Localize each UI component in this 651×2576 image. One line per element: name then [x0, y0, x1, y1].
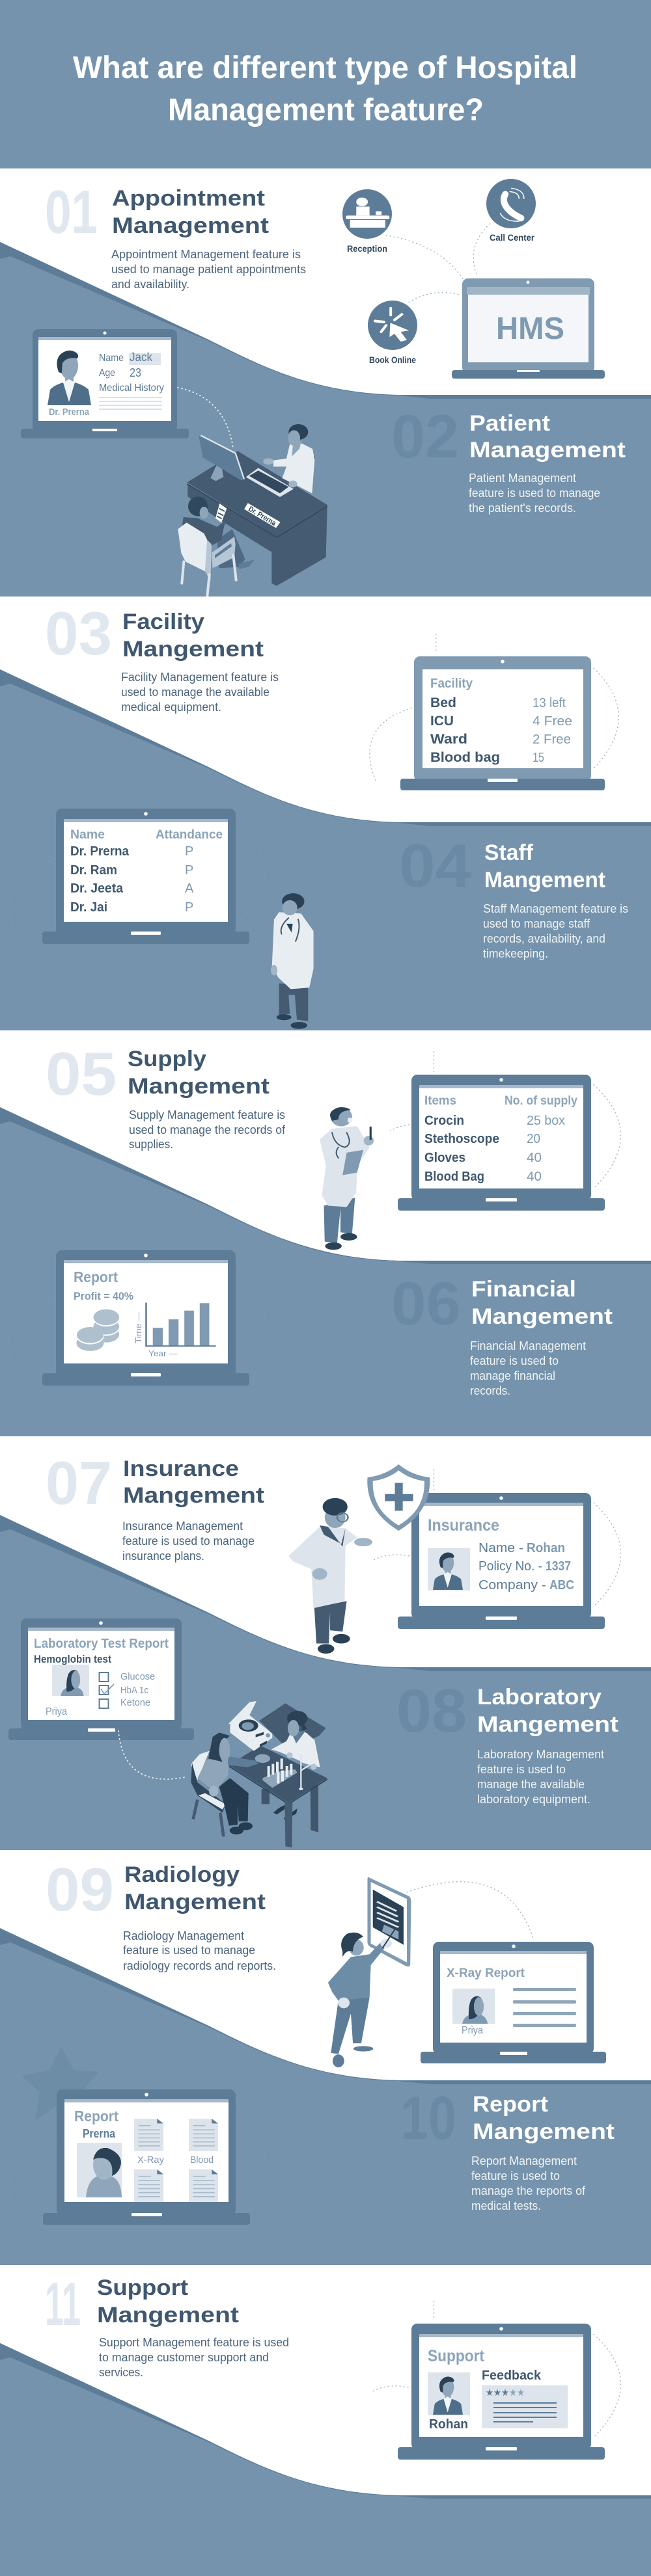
number 08: 08	[396, 1676, 467, 1745]
call center label: Call Center	[490, 233, 535, 243]
description	[122, 1519, 255, 1563]
heading: Mangement	[473, 2119, 615, 2144]
description: used to manage the available	[121, 685, 270, 699]
attendance table: Dr. Jeeta	[70, 881, 124, 896]
record fields: 23	[130, 366, 141, 379]
description	[99, 2335, 289, 2379]
description: Appointment Management feature is	[111, 247, 301, 261]
number 06: 06	[391, 1269, 461, 1337]
attendance table: P	[185, 900, 193, 915]
x-ray report title: X-Ray Report	[447, 1966, 525, 1980]
panel: 07 insurance management	[0, 1436, 651, 1671]
description	[123, 1929, 276, 1972]
description: Insurance Management	[122, 1519, 243, 1533]
policy details: Company -	[478, 1578, 546, 1592]
description: records, availability, and	[483, 932, 605, 945]
patient name: Priya	[462, 2025, 483, 2036]
description: Supply Management feature is	[129, 1108, 285, 1121]
supply rows: 40	[527, 1170, 542, 1184]
description: feature is used to	[477, 1762, 566, 1776]
white wave background	[0, 1850, 651, 2080]
icon: book online	[368, 301, 417, 350]
record fields	[99, 351, 164, 410]
bar chart: Time —	[133, 1312, 143, 1343]
laptop: support feedback	[398, 2324, 605, 2460]
heading	[128, 1047, 270, 1099]
heading: Management	[112, 213, 269, 238]
table text: Bed	[430, 695, 456, 710]
attendance table: Dr. Jai	[70, 900, 107, 915]
heading	[123, 1456, 264, 1508]
heading	[477, 1685, 618, 1737]
panel: 08 laboratory management	[8, 1618, 618, 1847]
feedback label: Feedback	[482, 2368, 542, 2383]
policy details: Name -	[478, 1541, 523, 1555]
attendance table: Dr. Prerna	[70, 844, 130, 859]
icon: reception	[342, 189, 392, 239]
report title: Laboratory Test Report	[34, 1637, 169, 1651]
panel: 06 financial management	[8, 1250, 613, 1397]
illustration: doctor with clipboard	[320, 1107, 374, 1250]
number 01: 01	[45, 178, 98, 246]
description: laboratory equipment.	[477, 1792, 590, 1806]
patient name: Prerna	[83, 2127, 116, 2140]
description: timekeeping.	[483, 946, 548, 960]
number 02: 02	[391, 402, 459, 470]
heading: Supply	[128, 1047, 206, 1071]
white wave background	[0, 168, 651, 395]
avatar: Priya	[52, 1665, 89, 1696]
description: feature is used to manage	[123, 1943, 255, 1957]
book online label: Book Online	[369, 355, 416, 365]
heading: Mangement	[123, 1483, 264, 1508]
illustration: laboratory team	[191, 1701, 327, 1847]
attendance table: Dr. Ram	[70, 863, 117, 878]
heading	[97, 2275, 239, 2328]
description: Staff Management feature is	[483, 902, 628, 915]
wave shadow band	[0, 669, 651, 826]
feedback card: ★★	[509, 2387, 525, 2398]
supply rows: 20	[527, 1132, 540, 1146]
report lines	[513, 1988, 576, 2027]
attendance table: Attandance	[156, 828, 223, 842]
title: What are different type of Hospital	[73, 51, 577, 85]
title: Management feature?	[168, 93, 484, 127]
heading: Mangement	[477, 1712, 618, 1737]
policy details: Policy No. -	[478, 1559, 542, 1574]
laptop: financial report	[42, 1250, 249, 1386]
laptop: insurance record	[398, 1493, 605, 1629]
description	[483, 902, 628, 960]
description	[470, 1339, 586, 1397]
description: manage financial	[470, 1369, 555, 1382]
feedback card: ★★★	[486, 2387, 509, 2398]
supply rows: Stethoscope	[424, 1132, 499, 1146]
heading: Mangement	[124, 1890, 266, 1914]
heading: Support	[97, 2275, 188, 2300]
description: supplies.	[129, 1137, 173, 1151]
description	[477, 1747, 604, 1806]
record fields: Name	[99, 353, 124, 364]
description: Radiology Management	[123, 1929, 244, 1942]
avatar: Rohan	[428, 1548, 470, 1590]
customer name: Rohan	[429, 2417, 468, 2432]
bar chart	[133, 1302, 216, 1358]
description: medical equipment.	[121, 700, 221, 714]
supply rows: Items	[424, 1094, 456, 1108]
reception label: Reception	[347, 244, 387, 254]
heading	[112, 186, 269, 238]
heading	[469, 411, 626, 463]
white wave background	[0, 2265, 651, 2495]
panel: 04 staff management	[8, 809, 628, 1029]
record fields: Age	[99, 368, 115, 379]
description: manage the reports of	[471, 2184, 586, 2197]
table text: Ward	[430, 732, 467, 747]
avatar: Prerna	[77, 2143, 122, 2197]
description: feature is used to manage	[469, 486, 600, 500]
checklist: Glucose	[120, 1671, 155, 1682]
panel: 09 radiology management	[0, 1850, 651, 2084]
illustration: standing doctor	[271, 893, 314, 1029]
document labels: Blood	[190, 2154, 214, 2166]
feedback card	[482, 2385, 568, 2428]
wave shadow band	[0, 2343, 651, 2499]
laptop: report documents	[43, 2089, 250, 2225]
heading	[124, 1862, 266, 1914]
heading: Financial	[471, 1277, 576, 1302]
description: used to manage the records of	[129, 1123, 286, 1136]
number 07: 07	[46, 1449, 112, 1517]
description: records.	[470, 1384, 510, 1397]
table text: 4 Free	[533, 714, 572, 729]
policy details: 1337	[546, 1559, 571, 1574]
attendance table: P	[185, 863, 193, 878]
heading	[122, 610, 264, 662]
description: services.	[99, 2365, 143, 2379]
table text	[430, 677, 572, 765]
supply rows: Crocin	[424, 1114, 464, 1128]
description: to manage customer support and	[99, 2350, 269, 2364]
policy details	[478, 1541, 574, 1592]
heading: Mangement	[471, 1304, 613, 1329]
checklist: Ketone	[120, 1697, 150, 1708]
heading	[471, 1277, 613, 1329]
description: radiology records and reports.	[123, 1959, 276, 1972]
number 11: 11	[45, 2270, 81, 2338]
avatar: doctor	[48, 351, 91, 405]
description: medical tests.	[471, 2199, 541, 2212]
description: feature is used to	[471, 2169, 560, 2182]
description: insurance plans.	[122, 1549, 204, 1563]
policy details: Rohan	[527, 1541, 565, 1555]
avatar: Priya	[452, 1989, 495, 2024]
bar chart: Year —	[148, 1348, 178, 1358]
heading: Mangement	[122, 637, 264, 662]
white wave background	[0, 1436, 651, 1667]
description: Support Management feature is used	[99, 2335, 289, 2349]
attendance table: Name	[70, 828, 105, 842]
panel: 10 report management	[8, 2047, 615, 2225]
table text: 2 Free	[533, 732, 571, 747]
table text: ICU	[430, 714, 454, 729]
heading: Report	[473, 2092, 548, 2117]
wave shadow band	[0, 1928, 651, 2084]
description: feature is used to manage	[122, 1534, 255, 1548]
panel: 05 supply management	[0, 1030, 651, 1264]
supply rows: Blood Bag	[424, 1170, 484, 1184]
name plate text: Dr. Prerna	[247, 505, 277, 528]
patient name: Priya	[46, 1706, 67, 1717]
HMS text: HMS	[496, 312, 564, 346]
description: used to manage patient appointments	[111, 262, 306, 276]
description: Facility Management feature is	[121, 670, 279, 684]
panel: 11 support management	[0, 2265, 651, 2499]
description	[111, 247, 306, 291]
policy details: ABC	[549, 1578, 574, 1592]
illustration: doctor with glasses	[288, 1498, 372, 1654]
heading: Management	[469, 438, 626, 463]
panel: 02 patient management	[21, 329, 626, 597]
description	[469, 471, 600, 515]
description: Laboratory Management	[477, 1747, 604, 1761]
laptop: supply table	[398, 1075, 605, 1211]
heading	[473, 2092, 615, 2144]
description: and availability.	[111, 277, 189, 291]
description	[471, 2154, 586, 2212]
document icons	[134, 2119, 218, 2202]
white wave background	[0, 1030, 651, 1261]
insurance title: Insurance	[428, 1516, 499, 1535]
laptop: facility table	[400, 656, 605, 790]
record fields: Jack	[130, 351, 153, 364]
decorative star	[21, 2047, 98, 2120]
illustration: doctor at desk with patient	[178, 424, 327, 597]
checklist: HbA 1c	[120, 1685, 148, 1696]
supply rows	[424, 1094, 577, 1184]
laptop: attendance	[42, 809, 249, 944]
icon: shield with cross	[367, 1464, 430, 1531]
number 03: 03	[45, 599, 112, 667]
table text: Facility	[430, 677, 473, 691]
table text: 15	[533, 751, 544, 765]
heading: Mangement	[128, 1074, 270, 1099]
white wave background	[0, 597, 651, 822]
description	[129, 1108, 286, 1151]
description: Report Management	[471, 2154, 577, 2167]
laptop: patient record	[21, 329, 189, 438]
heading: Patient	[469, 411, 550, 436]
laptop: HMS	[452, 278, 605, 379]
heading: Laboratory	[477, 1685, 602, 1710]
heading: Insurance	[123, 1456, 239, 1481]
avatar: Rohan	[428, 2372, 470, 2415]
number 04: 04	[399, 831, 471, 900]
attendance table: A	[185, 881, 194, 896]
illustration: woman at x-ray board	[328, 1877, 411, 2067]
attendance table: P	[185, 844, 193, 859]
heading: Radiology	[124, 1862, 240, 1887]
wave shadow band	[0, 1107, 651, 1264]
number 10: 10	[400, 2084, 456, 2152]
wave shadow band	[0, 1515, 651, 1671]
document labels	[137, 2154, 214, 2166]
report title: Report	[74, 1268, 118, 1285]
test name: Hemoglobin test	[34, 1653, 111, 1665]
panel: 01 appointment management	[0, 168, 651, 399]
table text: Blood bag	[430, 750, 500, 765]
icon: call center	[486, 179, 536, 228]
description: Financial Management	[470, 1339, 586, 1352]
supply rows: 40	[527, 1151, 542, 1165]
wave shadow band	[0, 242, 651, 399]
support title: Support	[428, 2347, 485, 2365]
document labels: X-Ray	[137, 2154, 164, 2166]
number 05: 05	[46, 1040, 117, 1108]
heading: Mangement	[97, 2303, 239, 2328]
description: manage the available	[477, 1777, 585, 1791]
laptop: laboratory test report	[8, 1618, 194, 1740]
heading: Mangement	[484, 868, 605, 892]
table text: 13 left	[533, 696, 566, 710]
heading: Staff	[484, 840, 534, 865]
description: used to manage staff	[483, 917, 590, 930]
number 09: 09	[46, 1855, 114, 1924]
icon: coin stacks	[76, 1309, 119, 1351]
supply rows: 25 box	[527, 1114, 565, 1128]
doctor name: Dr. Prerna	[49, 407, 90, 418]
description: the patient's records.	[469, 501, 576, 515]
report title: Report	[74, 2108, 118, 2125]
description: Patient Management	[469, 471, 576, 485]
checklist	[99, 1671, 155, 1708]
laptop: x-ray report	[421, 1942, 606, 2063]
description: feature is used to	[470, 1354, 559, 1367]
supply rows: No. of supply	[505, 1094, 577, 1108]
supply rows: Gloves	[424, 1151, 465, 1165]
record fields: Medical History	[99, 382, 164, 394]
heading	[484, 840, 605, 892]
heading: Facility	[122, 610, 204, 634]
attendance table	[70, 828, 223, 915]
panel: 03 facility management	[0, 597, 651, 826]
title	[73, 51, 577, 127]
heading: Appointment	[112, 186, 265, 211]
profit label: Profit = 40%	[74, 1290, 133, 1302]
description	[121, 670, 279, 714]
